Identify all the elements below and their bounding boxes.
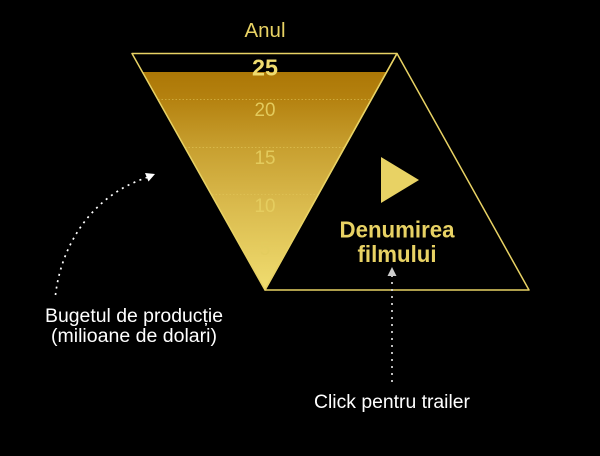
scale value 25: 25: [252, 54, 278, 80]
film triangle outline: [265, 54, 529, 290]
arrow: up to film title: [388, 267, 396, 382]
budget fill: [143, 72, 386, 290]
scale value 15: 15: [254, 148, 276, 169]
arrow: curved to budget fill: [56, 173, 155, 295]
scale value 20: 20: [254, 100, 276, 121]
label: click for trailer: Click pentru trailer: [314, 392, 471, 413]
label: production budget unit: (milioane de dolari): [51, 326, 217, 347]
budget funnel triangle: [132, 54, 397, 290]
film title: Denumirea: [340, 216, 455, 242]
scale value 10: 10: [254, 196, 276, 217]
scale value 5: 5: [260, 239, 270, 260]
heading: year axis: Anul: [244, 19, 286, 42]
triangle outline: [132, 54, 397, 290]
icon: play button: [381, 157, 419, 203]
film title second line: filmului: [358, 241, 436, 267]
label: production budget: Bugetul de producție: [45, 306, 223, 327]
